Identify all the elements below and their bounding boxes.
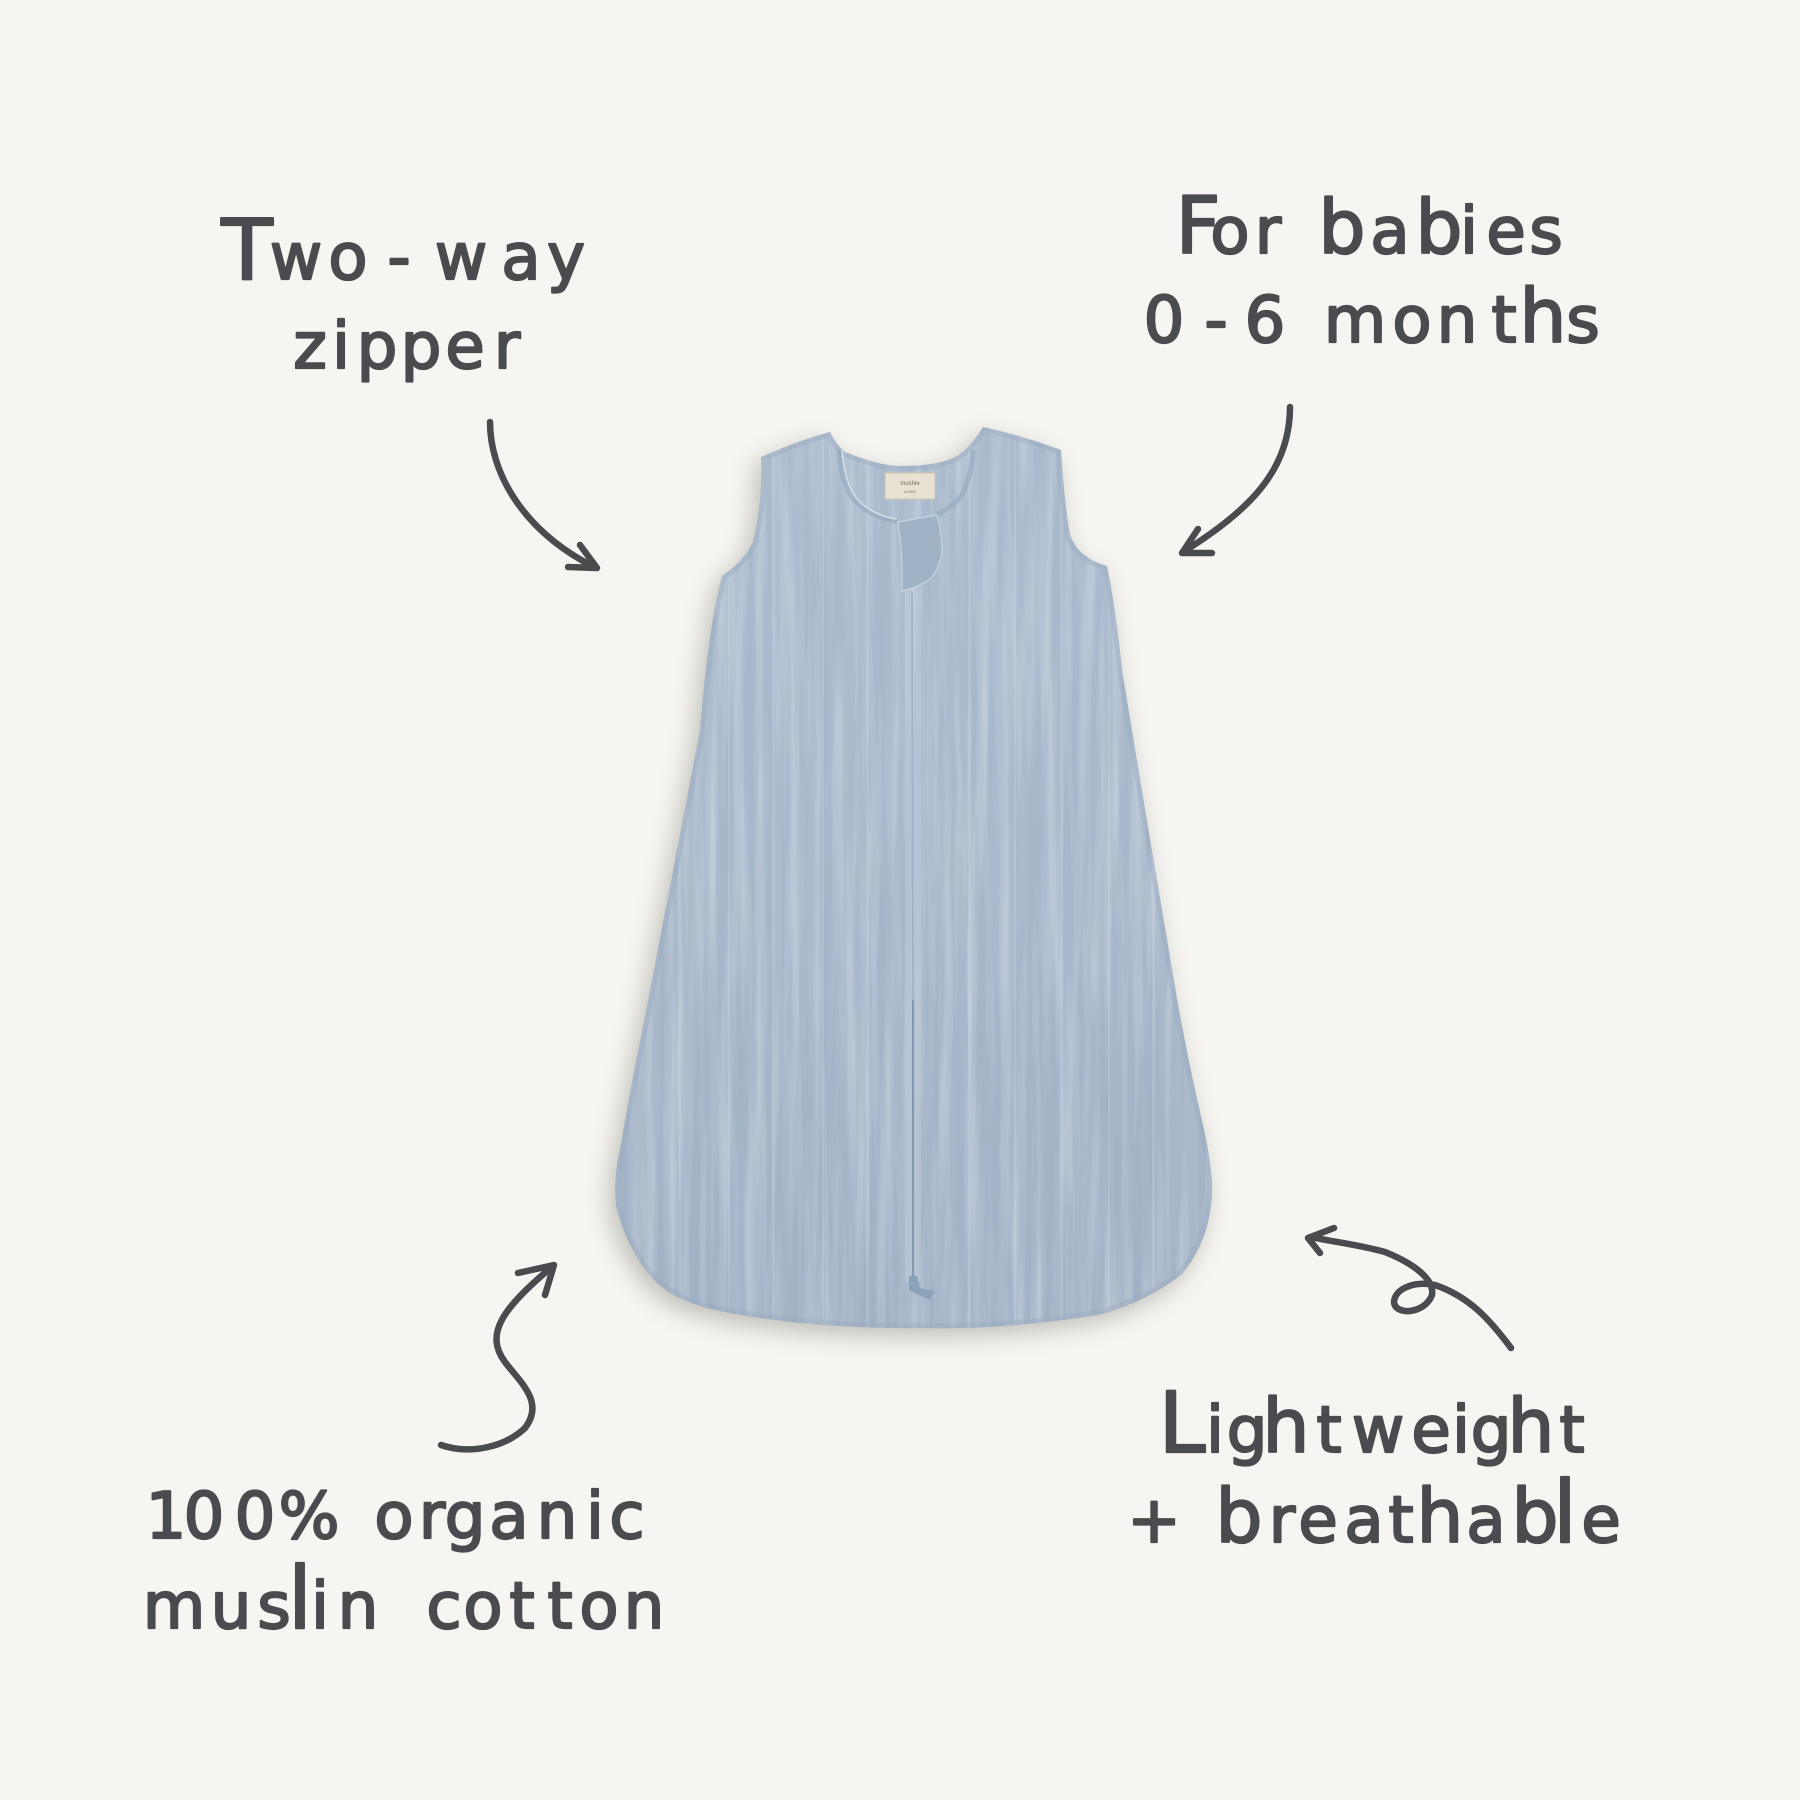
neck label: & KIDS xyxy=(904,490,916,494)
callout: two-way zipper xyxy=(220,201,597,568)
squiggle arrow to garment xyxy=(441,1265,554,1449)
garment body xyxy=(615,427,1212,1328)
arrow to garment xyxy=(490,422,597,568)
text: lightweight + breathable: t xyxy=(1559,1394,1585,1468)
text: lightweight + breathable: h xyxy=(1417,1474,1463,1560)
muslin texture xyxy=(631,432,1212,1328)
text: two-way zipper: T xyxy=(220,201,273,299)
text: 100% organic muslin cotton: 1 xyxy=(146,1480,186,1554)
zipper line, lower part xyxy=(912,1000,914,1278)
text: lightweight + breathable: h xyxy=(1508,1384,1554,1470)
zipper pull xyxy=(909,1276,935,1300)
text: lightweight + breathable: a xyxy=(1466,1484,1506,1558)
looping arrow to garment xyxy=(1308,1228,1511,1348)
text: 100% organic muslin cotton: in cotton xyxy=(311,1570,664,1644)
product photo: sleep bag xyxy=(600,420,1230,1340)
text: for babies 0-6 months: h xyxy=(1520,274,1566,360)
callout: lightweight xyxy=(1127,1228,1621,1563)
zipper garage tab xyxy=(898,515,942,591)
text: lightweight + breathable: e xyxy=(1581,1484,1621,1558)
neck label: mushie xyxy=(900,481,920,487)
text: for babies 0-6 months: b xyxy=(1319,185,1365,271)
text: lightweight + breathable: l xyxy=(1553,1463,1577,1563)
neck label xyxy=(885,473,935,499)
text: lightweight + breathable: b xyxy=(1216,1474,1262,1560)
callout: age range xyxy=(1144,182,1600,553)
text: lightweight + breathable: ig xyxy=(1206,1394,1267,1468)
neckline seam xyxy=(839,450,973,521)
text: lightweight + breathable: + xyxy=(1127,1484,1206,1558)
text: for babies 0-6 months: ies xyxy=(1460,195,1563,269)
text: lightweight + breathable: reat xyxy=(1269,1484,1414,1558)
garment shadow xyxy=(609,435,1206,1336)
callout: organic cotton xyxy=(143,1265,664,1649)
arrow to garment xyxy=(1182,407,1290,553)
zipper line, upper part xyxy=(912,592,913,1000)
text: 100% organic muslin cotton: mus xyxy=(143,1570,291,1644)
text: for babies 0-6 months: or xyxy=(1210,195,1306,269)
text: lightweight + breathable: tweig xyxy=(1316,1394,1511,1468)
text: for babies 0-6 months: 0-6 mont xyxy=(1144,284,1517,358)
text: for babies 0-6 months: a xyxy=(1370,195,1410,269)
text: for babies 0-6 months: b xyxy=(1416,185,1462,271)
text: two-way zipper: wo-way xyxy=(270,221,585,295)
text: 100% organic muslin cotton: l xyxy=(288,1549,312,1649)
zipper placket xyxy=(905,592,921,1282)
text: 100% organic muslin cotton: 00% organic xyxy=(184,1480,645,1554)
garment hem xyxy=(615,427,1212,1328)
text: lightweight + breathable: h xyxy=(1263,1384,1309,1470)
text: lightweight + breathable: b xyxy=(1512,1474,1558,1560)
text: two-way zipper: zipper xyxy=(293,310,521,384)
neckline highlight xyxy=(842,450,897,519)
text: for babies 0-6 months: F xyxy=(1176,182,1220,272)
text: lightweight + breathable: L xyxy=(1159,1374,1206,1472)
text: for babies 0-6 months: s xyxy=(1566,284,1600,358)
infographic canvas xyxy=(148,194,1618,1630)
